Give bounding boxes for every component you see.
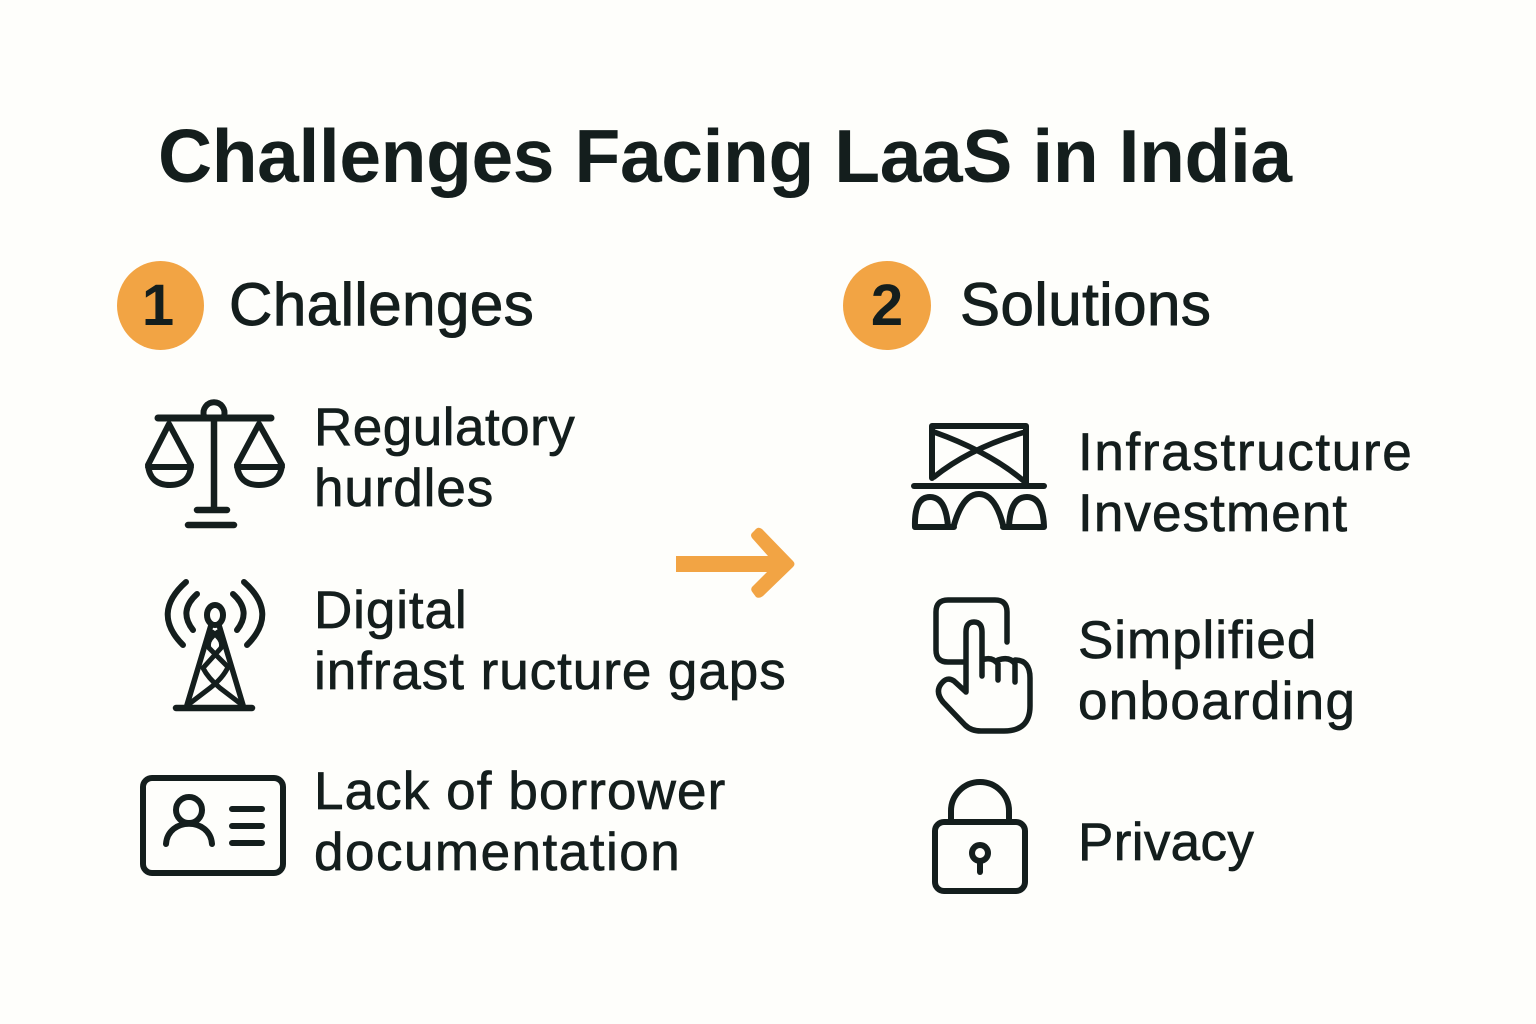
text: simplified onboarding: Simplified bbox=[1078, 611, 1317, 670]
text: regulatory hurdles bbox=[314, 398, 576, 518]
badge 1 bbox=[117, 261, 204, 350]
text: digital infrastructure gaps: Digital bbox=[314, 581, 468, 640]
text: infrastructure investment: Infrastructure bbox=[1078, 423, 1413, 482]
text: digital infrastructure gaps bbox=[314, 581, 787, 701]
text: privacy: Privacy bbox=[1078, 813, 1254, 872]
panel: challenges bbox=[117, 261, 787, 882]
arrow bbox=[676, 528, 794, 598]
icon: padlock bbox=[935, 782, 1025, 891]
heading: challenges: Challenges bbox=[229, 271, 534, 338]
icon: id card bbox=[143, 778, 283, 873]
text: infrastructure investment: Investment bbox=[1078, 484, 1348, 543]
text: simplified onboarding bbox=[1078, 611, 1356, 731]
icon: bridge bbox=[914, 426, 1044, 527]
panel: solutions bbox=[843, 261, 1413, 872]
text: lack of borrower documentation: Lack of borrower bbox=[314, 762, 726, 821]
icon: pointing hand bbox=[936, 600, 1030, 731]
text: lack of borrower documentation bbox=[314, 762, 726, 882]
text: infrastructure investment bbox=[1078, 423, 1413, 543]
badge 1: 1 bbox=[142, 273, 174, 338]
heading: solutions: Solutions bbox=[960, 271, 1211, 338]
icon: scales bbox=[148, 402, 282, 525]
badge 2 bbox=[843, 261, 931, 350]
title: Challenges Facing LaaS in India bbox=[158, 114, 1292, 198]
icon: signal tower bbox=[168, 582, 262, 708]
text: lack of borrower documentation: documentation bbox=[314, 823, 681, 882]
text: regulatory hurdles: Regulatory bbox=[314, 398, 575, 457]
text: digital infrastructure gaps: infrast ructure gaps bbox=[314, 642, 787, 701]
text: regulatory hurdles: hurdles bbox=[314, 459, 494, 518]
badge 2: 2 bbox=[871, 273, 903, 338]
text: simplified onboarding: onboarding bbox=[1078, 672, 1356, 731]
